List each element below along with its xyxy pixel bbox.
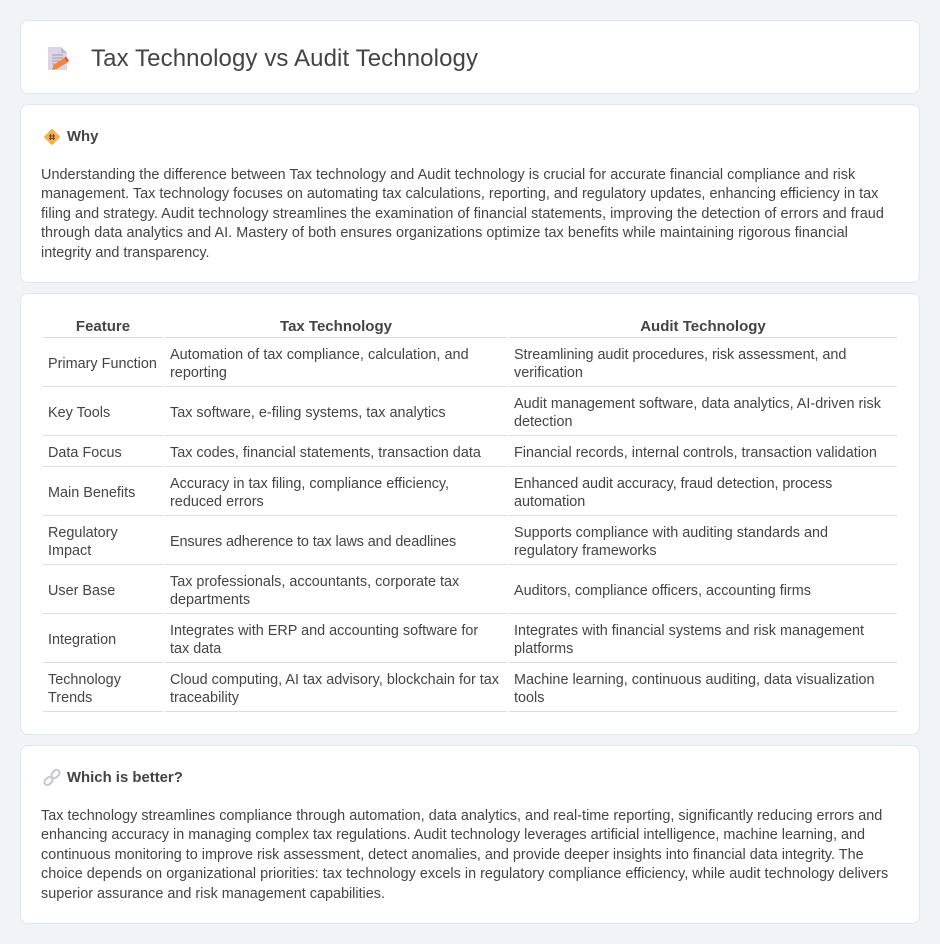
text block: why: Understanding the difference between Tax technology and Audit technology is crucial for accurate financial compliance and risk [41,167,855,183]
row: key tools: Tax software, e-filing systems, tax analytics [170,405,446,421]
heading: why: Why [67,129,98,145]
text block: which is better: Tax technology streamlines compliance through automation, data analytics, and real-time reporting, significantly reducing errors and [41,808,882,824]
icon: document with pencil [48,47,69,70]
text block: which is better: continuous monitoring to improve risk assessment, detect anomalies, and provide deeper insights into financial data integrity. The [41,847,864,863]
table header: audit technology: Audit Technology [640,318,766,335]
row: regulatory impact: regulatory frameworks [514,543,657,559]
row: integration: platforms [514,641,573,657]
row: integration: Integration [48,632,116,648]
row: integration: tax data [170,641,221,657]
row: primary function: reporting [170,365,227,381]
text block: which is better: superior assurance and risk management capabilities. [41,886,385,902]
row: key tools [48,396,881,430]
row: main benefits: Enhanced audit accuracy, fraud detection, process [514,476,832,492]
row: technology trends: tools [514,690,544,706]
row: primary function: Automation of tax compliance, calculation, and [170,347,469,363]
panel: why [20,104,920,283]
row: integration [48,623,864,657]
row: primary function: verification [514,365,583,381]
row: main benefits: automation [514,494,585,510]
row: data focus: Financial records, internal controls, transaction validation [514,445,877,461]
row: regulatory impact: Ensures adherence to tax laws and deadlines [170,534,456,550]
row: key tools: Audit management software, data analytics, AI-driven risk [514,396,881,412]
row: technology trends: Cloud computing, AI tax advisory, blockchain for tax [170,672,499,688]
text block: which is better: choice depends on organizational priorities: tax technology excels in regulatory compliance efficiency, while audit technology delivers [41,866,888,882]
row: main benefits: Main Benefits [48,485,135,501]
row: primary function [48,347,846,381]
row: main benefits [48,476,832,510]
icon: warning diamond [44,129,60,145]
row: technology trends: Technology [48,672,121,688]
title: Tax Technology vs Audit Technology [91,45,478,72]
row: user base: User Base [48,583,115,599]
icon: link [43,768,61,786]
row: primary function: Streamlining audit procedures, risk assessment, and [514,347,846,363]
text block: why: integrity and transparency. [41,245,210,261]
text block: why [41,167,884,261]
text block: which is better [41,808,888,902]
row: technology trends: traceability [170,690,239,706]
row: regulatory impact: Regulatory [48,525,118,541]
panel: which is better [20,745,920,924]
row: user base: departments [170,592,250,608]
text block: why: through data analytics and AI. Mastery of both ensures organizations optimize tax benefits while maintaining rigorous financial [41,225,848,241]
row: user base: Auditors, compliance officers, accounting firms [514,583,811,599]
row: data focus [48,445,877,461]
heading: which is better: Which is better? [67,770,183,786]
text block: why: filing and strategy. Audit technology streamlines the examination of financial statements, improving the detection of errors and fraud [41,206,884,222]
row: main benefits: reduced errors [170,494,264,510]
row: integration: Integrates with ERP and accounting software for [170,623,478,639]
row: technology trends: Machine learning, continuous auditing, data visualization [514,672,875,688]
row: key tools: detection [514,414,572,430]
text block: which is better: enhancing accuracy in managing complex tax regulations. Audit technology leverages artificial intelligence, machine learning, and [41,827,865,843]
table header: tax technology: Tax Technology [280,318,392,335]
row: technology trends [48,672,875,706]
row: data focus: Tax codes, financial statements, transaction data [170,445,481,461]
panel: comparison table [20,293,920,735]
row: key tools: Key Tools [48,405,110,421]
row: integration: Integrates with financial systems and risk management [514,623,864,639]
row: user base: Tax professionals, accountants, corporate tax [170,574,459,590]
row: regulatory impact: Supports compliance with auditing standards and [514,525,828,541]
row: technology trends: Trends [48,690,92,706]
row: data focus: Data Focus [48,445,122,461]
row: user base [48,574,811,608]
row: regulatory impact: Impact [48,543,91,559]
text block: why: management. Tax technology focuses on automating tax calculations, reporting, and regulatory updates, enhancing efficiency in tax [41,186,878,202]
row: main benefits: Accuracy in tax filing, compliance efficiency, [170,476,449,492]
row: primary function: Primary Function [48,356,157,372]
table header: feature: Feature [76,318,130,335]
panel: title card [20,20,920,94]
row: regulatory impact [48,525,828,559]
